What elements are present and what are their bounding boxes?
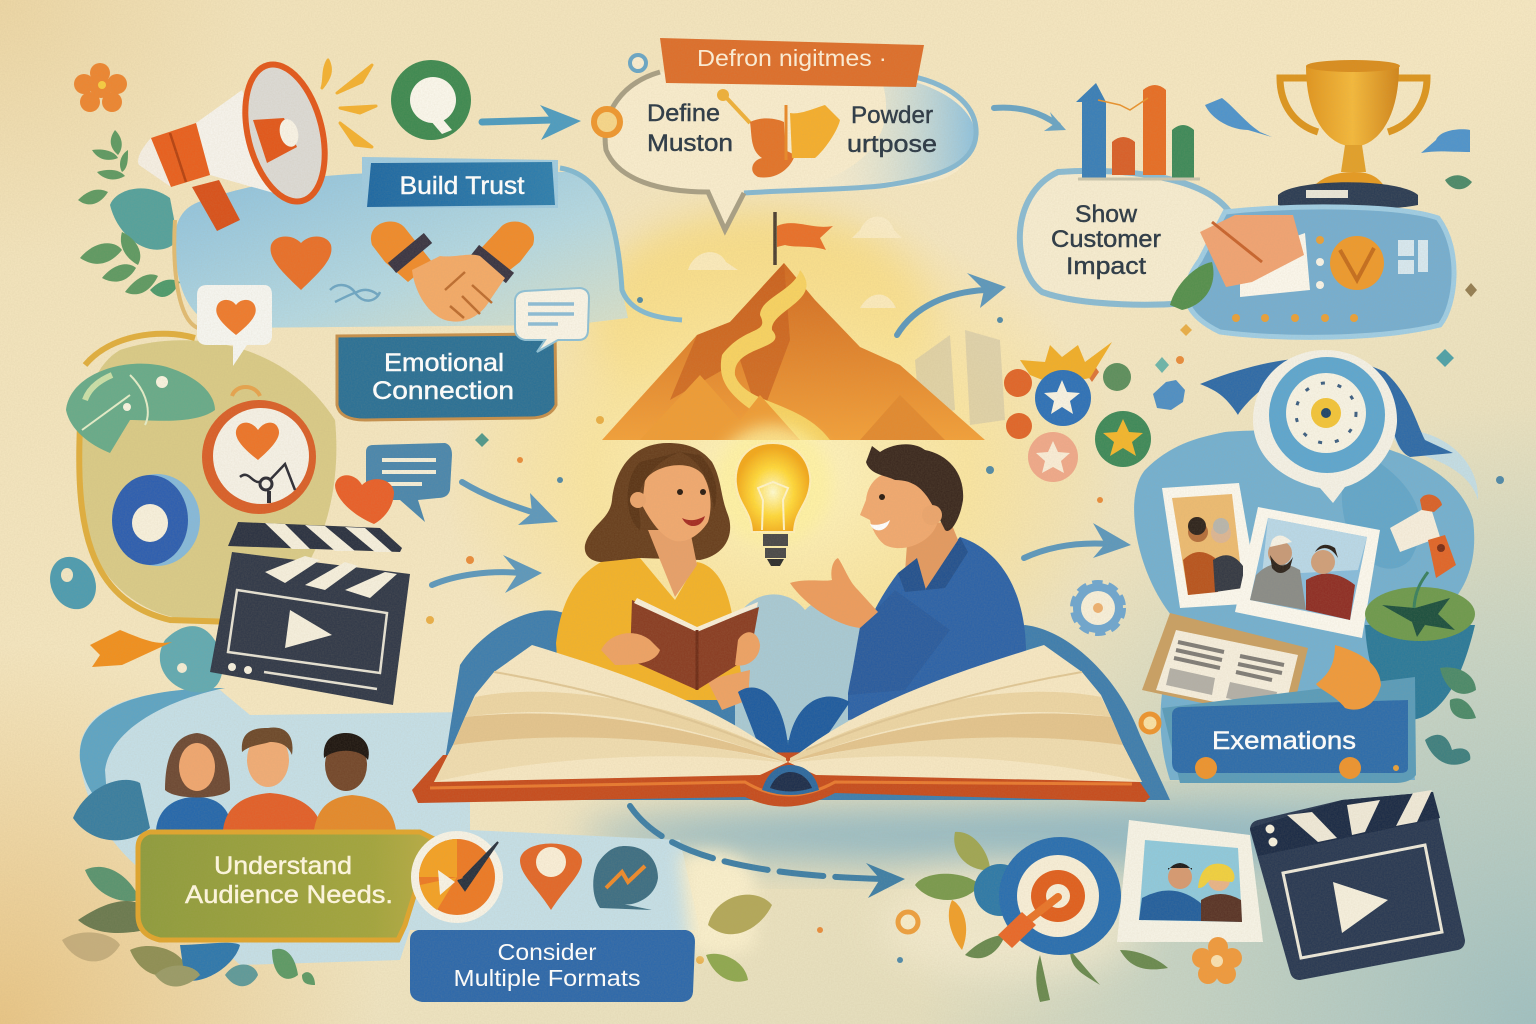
icon: target xyxy=(898,832,1168,1002)
icon: gear flower xyxy=(1073,583,1123,633)
banner: build trust: Build Trust xyxy=(400,172,525,200)
photo 2 xyxy=(1235,507,1380,638)
panel: define bubble xyxy=(594,38,976,230)
right blue watercolor blob xyxy=(1134,430,1478,780)
icon: green leaf left xyxy=(66,364,215,453)
icon: clapperboard left xyxy=(210,522,410,705)
icon: mini layout xyxy=(1398,240,1428,274)
illustration: three people xyxy=(156,727,396,830)
banner: defron nigitmes xyxy=(660,38,924,87)
bar chart xyxy=(1076,83,1200,179)
bottom-left blue swoosh xyxy=(80,688,755,965)
text: consider multiple formats: Multiple Formats xyxy=(454,965,640,991)
icon: teal blob with dots xyxy=(160,626,223,692)
icon: plant pot xyxy=(1365,572,1475,720)
centre bluish hills behind people xyxy=(735,594,880,740)
icon: eye speech bubble xyxy=(1200,350,1453,503)
illustration: man talking xyxy=(790,444,1026,720)
icon: clock with heart xyxy=(202,387,316,514)
text: understand audience needs: Audience Needs. xyxy=(185,881,393,909)
icon: summit flag xyxy=(775,212,833,265)
arrow to impact xyxy=(897,273,1006,335)
blue wash behind book xyxy=(445,610,1170,800)
icon: chat chart bubble xyxy=(593,846,658,910)
banner: build trust xyxy=(362,157,558,208)
arrow to define bubble xyxy=(482,105,581,140)
icon: bottom left leaves xyxy=(62,780,748,987)
panel: consider multiple formats xyxy=(410,930,695,1002)
icon: envelope xyxy=(1200,215,1310,297)
curved arrow under book xyxy=(630,806,905,898)
icon: light bulb xyxy=(713,425,833,566)
icon: blue fish birds xyxy=(1205,98,1470,153)
arrow to photos xyxy=(1024,523,1131,558)
icon: orange emblem xyxy=(717,89,840,178)
icon: small leaves xyxy=(1170,262,1213,310)
photo bottom xyxy=(1117,820,1263,942)
text: consider multiple formats: Consider xyxy=(498,939,597,965)
text: define muston: Muston xyxy=(647,130,733,157)
icon: orange check badge xyxy=(1330,236,1384,290)
text: exemations: Exemations xyxy=(1212,727,1356,755)
illustration: blue trousers xyxy=(738,687,850,775)
panel: understand audience needs xyxy=(138,832,432,940)
illustration: woman reading xyxy=(556,443,750,710)
icon: blue ring disc xyxy=(42,474,200,617)
photo 1 xyxy=(1162,483,1260,608)
icon: leaves right xyxy=(1425,175,1476,765)
icon: small orange megaphone tool xyxy=(1390,495,1456,578)
text: define muston: Define xyxy=(647,100,720,127)
icon: orange pie gauge xyxy=(411,831,503,923)
icon: olive leaf xyxy=(708,895,772,934)
icon: chat bubble small xyxy=(515,288,589,352)
icon: small flower xyxy=(1192,937,1242,984)
icon: map pin xyxy=(520,844,582,910)
text: emotional connection: Connection xyxy=(372,377,514,405)
panel: exemations xyxy=(1141,677,1416,783)
text: understand audience needs: Understand xyxy=(214,852,352,880)
banner: defron nigitmes: Defron nigitmes · xyxy=(697,45,887,71)
icon: newspaper xyxy=(1142,613,1308,722)
icon: megaphone xyxy=(138,56,376,231)
icon: trophy xyxy=(1278,60,1427,210)
text: show customer impact: Customer xyxy=(1051,226,1161,253)
mountain with path xyxy=(602,212,1005,440)
panel: emotional connection xyxy=(337,334,556,420)
panel: show customer impact bubble xyxy=(1020,171,1228,305)
icon: orange blobs xyxy=(1316,645,1381,710)
icon: link symbol xyxy=(330,285,380,302)
panel: customer impact right xyxy=(1170,207,1454,337)
icon: stars mobile xyxy=(1004,342,1185,482)
icon: handshake xyxy=(371,222,534,322)
icon: heart xyxy=(271,236,331,290)
text: emotional connection: Emotional xyxy=(384,349,504,377)
text: show customer impact: Impact xyxy=(1066,253,1146,280)
text: show customer impact: Show xyxy=(1075,201,1138,228)
left olive watercolor panel xyxy=(79,334,336,623)
illustration: open book xyxy=(412,645,1150,807)
arrow to chart xyxy=(994,108,1066,131)
icon: leaves left of megaphone xyxy=(78,130,180,297)
icon: orange autumn leaf xyxy=(90,630,172,667)
icon: chat bubble left xyxy=(366,443,452,522)
icon: orange heart xyxy=(335,475,394,524)
icon: heart speech bubble xyxy=(197,285,272,366)
target ring node xyxy=(594,109,620,135)
icon: flower top-left xyxy=(74,63,127,112)
illustration: small reading book xyxy=(601,598,760,690)
text: powder urtpose: Powder xyxy=(851,102,933,129)
icon: green circle q badge xyxy=(391,60,471,140)
panel: build trust xyxy=(174,157,682,366)
icon: clapperboard right xyxy=(1250,790,1465,980)
scattered confetti dots xyxy=(116,247,1504,964)
text: powder urtpose: urtpose xyxy=(847,131,937,158)
arrows pointing to centre left xyxy=(432,482,558,593)
